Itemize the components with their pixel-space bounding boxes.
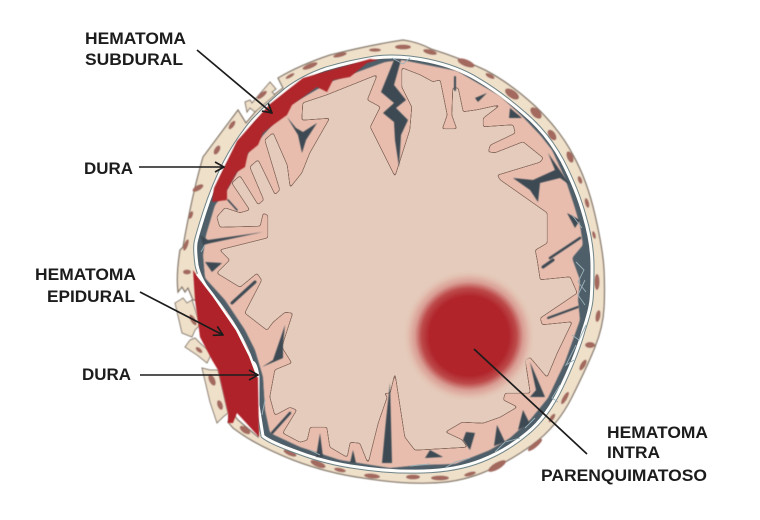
epidural hematoma xyxy=(193,270,259,437)
white matter xyxy=(217,68,577,463)
label: hematoma intraparenquimatoso: HEMATOMA xyxy=(607,424,708,442)
label: hematoma epidural xyxy=(35,266,136,306)
label: hematoma subdural xyxy=(85,30,186,69)
skull fragment: upper xyxy=(245,82,276,112)
sulci xyxy=(200,60,580,463)
label: dura lower: DURA xyxy=(82,366,131,384)
arrow: epidural xyxy=(140,292,223,335)
label: hematoma intraparenquimatoso xyxy=(541,424,708,485)
label: hematoma epidural: EPIDURAL xyxy=(47,288,135,306)
intracranial cavity and dura xyxy=(196,57,592,471)
intraparenchymal hematoma xyxy=(403,270,535,402)
label: dura upper: DURA xyxy=(84,160,133,178)
leader line: intraparenchymal xyxy=(474,349,587,454)
dura outer edge xyxy=(196,57,592,471)
arrow: dura lower xyxy=(140,374,258,376)
brain xyxy=(200,58,586,468)
label: hematoma subdural: HEMATOMA xyxy=(85,30,186,48)
meningeal mottling xyxy=(201,58,586,468)
skull fragment: lower 3 xyxy=(202,368,228,423)
label: hematoma subdural: SUBDURAL xyxy=(85,51,183,69)
skull cross-section xyxy=(175,40,604,483)
dura line over epidural hematoma xyxy=(197,274,258,377)
label: hematoma intraparenquimatoso: INTRA xyxy=(607,444,660,462)
subdural hematoma xyxy=(212,59,378,202)
skull fragment: lower 1 xyxy=(175,298,200,337)
cortex xyxy=(203,60,583,468)
label: hematoma intraparenquimatoso: PARENQUIMATOSO xyxy=(541,467,707,485)
arrow: dura upper xyxy=(139,166,224,168)
skull fragment: lower 2 xyxy=(185,338,212,363)
skull bone xyxy=(177,40,605,483)
label: hematoma epidural: HEMATOMA xyxy=(35,266,136,284)
bone marrow spots xyxy=(182,45,601,480)
arrow: subdural xyxy=(197,50,272,113)
